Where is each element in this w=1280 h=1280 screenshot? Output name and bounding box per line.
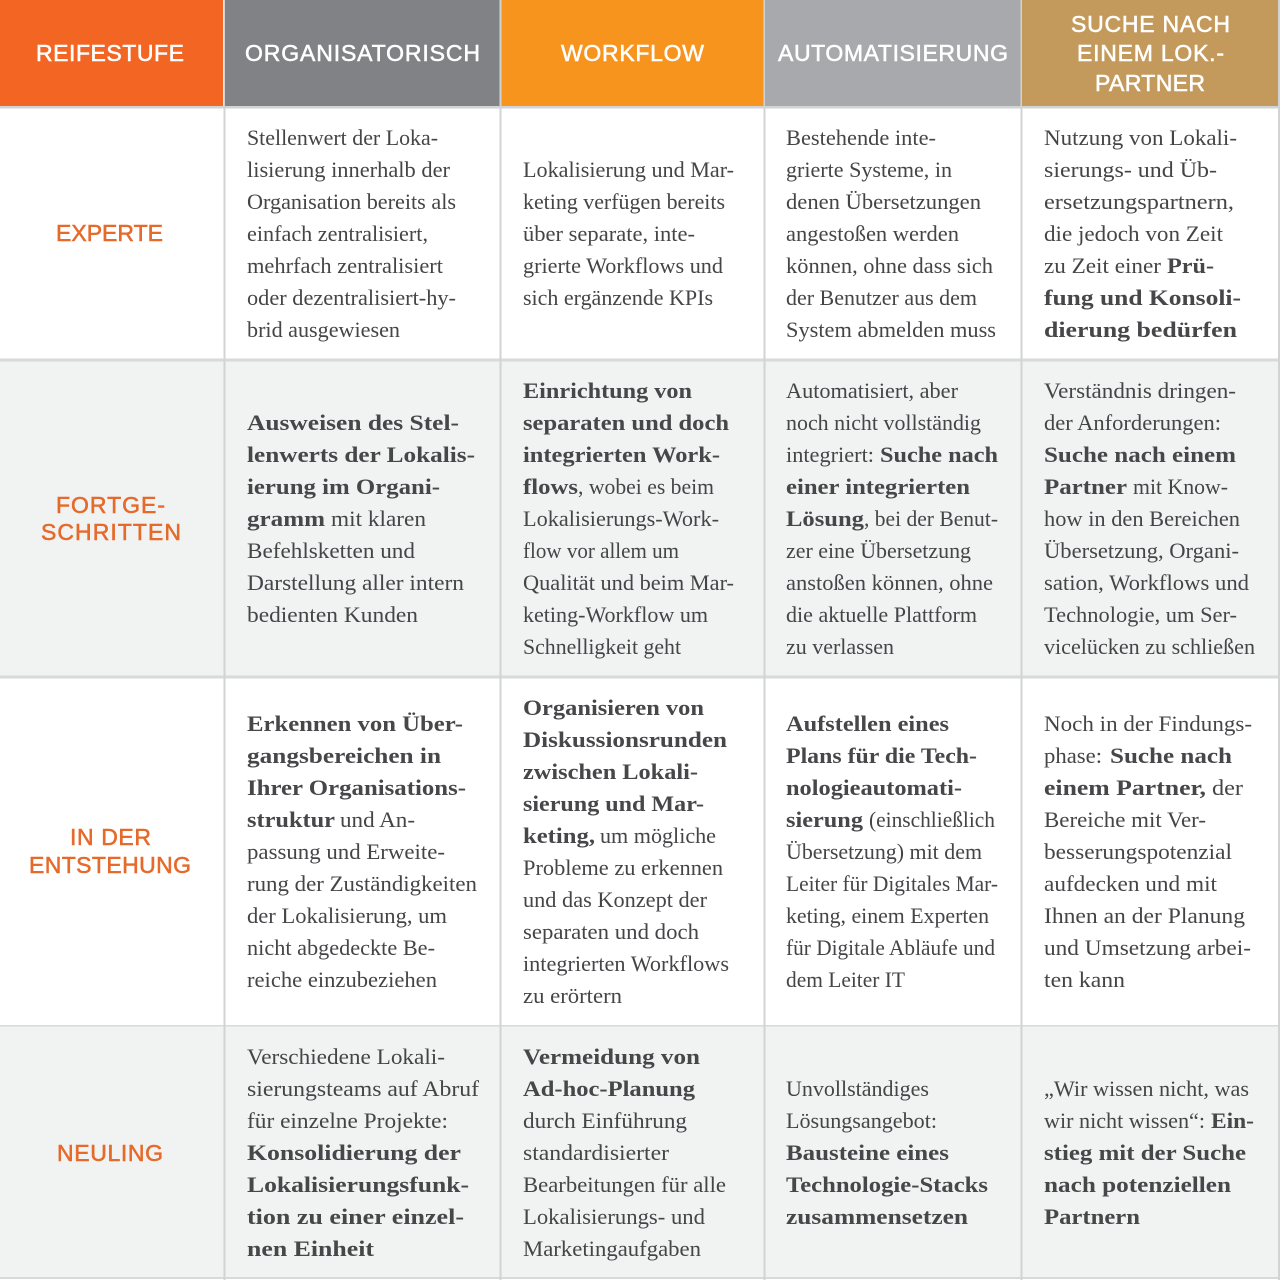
cell: Neuling, Automatisierung: Technologie-Stacks [786,1172,988,1197]
cell: In der Entstehung, organisatorisch: rung der Zuständigkeiten [247,871,477,896]
cell: Fortgeschritten, Workflow: keting-Workflow um [523,602,708,627]
cell: Fortgeschritten, Automatisierung: , bei der Benut- [864,506,998,531]
cell: In der Entstehung, Workflow: separaten und doch [523,919,699,944]
cell: Fortgeschritten, Automatisierung: zer eine Übersetzung [786,538,971,563]
cell: Fortgeschritten, Automatisierung [786,378,998,659]
header: Organisatorisch: ORGANISATORISCH [245,40,480,66]
cell: In der Entstehung, Workflow: Probleme zu erkennen [523,855,723,880]
cell: Neuling, Workflow [523,1044,726,1261]
cell: Fortgeschritten, Workflow: , wobei es beim [578,474,714,499]
row: Fortgeschritten [41,378,1255,659]
cell: Experte, organisatorisch: Stellenwert der Loka- [247,125,438,150]
cell: In der Entstehung, Workflow: zwischen Lokali- [523,759,698,784]
row label: In der Entstehung: IN DER [70,824,151,850]
cell: In der Entstehung, organisatorisch: nicht abgedeckte Be- [247,935,435,960]
cell: Neuling, organisatorisch: Konsolidierung der [247,1140,461,1165]
cell: Fortgeschritten, Lok.-Partner: Suche nach einem [1044,442,1236,467]
cell: Neuling, Workflow: durch Einführung [523,1108,687,1133]
cell: In der Entstehung, Lok.-Partner [1044,711,1252,992]
cell: Fortgeschritten, Automatisierung: Automatisiert, aber [786,378,959,403]
cell: Neuling, Workflow: Vermeidung von [523,1044,700,1069]
cell: Experte, organisatorisch: mehrfach zentralisiert [247,253,443,278]
cell: Experte, Lok.-Partner: sierungs- und Üb- [1044,157,1217,182]
header: Workflow [502,0,764,106]
cell: Neuling, Automatisierung: Bausteine eines [786,1140,949,1165]
cell: In der Entstehung, Automatisierung: Plans für die Tech- [786,743,977,768]
cell: Experte, Automatisierung: denen Übersetzungen [786,189,981,214]
header: Suche nach einem Lok.-Partner: SUCHE NACH [1071,11,1230,37]
cell: In der Entstehung, organisatorisch: passung und Erweite- [247,839,445,864]
cell: In der Entstehung, organisatorisch: Erkennen von Über- [247,711,463,736]
header: Suche nach einem Lok.-Partner: EINEM LOK.- [1077,40,1224,66]
row label: Fortgeschritten [41,492,181,545]
cell: Fortgeschritten, Automatisierung: einer integrierten [786,474,970,499]
cell: Fortgeschritten, Workflow: Einrichtung von [523,378,692,403]
row label: Fortgeschritten: SCHRITTEN [41,519,181,545]
cell: Experte, Lok.-Partner: zu Zeit einer [1044,253,1162,278]
cell: Fortgeschritten, Workflow: integrierten Work- [523,442,720,467]
cell: In der Entstehung, Workflow [523,695,729,1008]
cell: Neuling, Workflow: standardisierter [523,1140,670,1165]
cell: Neuling, Automatisierung: Lösungsangebot: [786,1108,937,1133]
cell: In der Entstehung, Automatisierung: Aufstellen eines [786,711,949,736]
cell: Fortgeschritten, Automatisierung: Suche nach [880,442,998,467]
cell: Experte, Workflow: Lokalisierung und Mar- [523,157,734,182]
cell: Neuling, organisatorisch: tion zu einer einzel- [247,1204,464,1229]
cell: In der Entstehung, Automatisierung: sierung [786,807,863,832]
cell: In der Entstehung, Workflow: integrierten Workflows [523,951,729,976]
cell: Experte, Workflow: sich ergänzende KPIs [523,285,713,310]
cell: In der Entstehung, Lok.-Partner: der [1212,775,1244,800]
cell: Fortgeschritten, organisatorisch: bedienten Kunden [247,602,418,627]
cell: In der Entstehung, Lok.-Partner: Bereiche mit Ver- [1044,807,1206,832]
cell: Experte, organisatorisch: Organisation bereits als [247,189,456,214]
cell: Fortgeschritten, Lok.-Partner: sation, Workflows und [1044,570,1249,595]
cell: Experte, Lok.-Partner: die jedoch von Zeit [1044,221,1223,246]
cell: Experte, Automatisierung: grierte Systeme, in [786,157,952,182]
cell: Neuling, organisatorisch: für einzelne Projekte: [247,1108,448,1133]
cell: In der Entstehung, organisatorisch: der Lokalisierung, um [247,903,447,928]
cell: In der Entstehung, Lok.-Partner: Ihnen an der Planung [1044,903,1245,928]
cell: In der Entstehung, Automatisierung [786,711,998,992]
cell: Neuling, Lok.-Partner: nach potenziellen [1044,1172,1231,1197]
cell: In der Entstehung, organisatorisch [247,711,477,992]
cell: Neuling, Workflow: Lokalisierungs- und [523,1204,705,1229]
row label: In der Entstehung [29,824,191,878]
cell: Neuling, Lok.-Partner: Ein- [1211,1108,1254,1133]
cell: Neuling, Lok.-Partner: stieg mit der Suche [1044,1140,1246,1165]
cell: Experte, organisatorisch: einfach zentralisiert, [247,221,428,246]
header: Reifestufe: REIFESTUFE [36,40,184,66]
cell: Experte, organisatorisch: brid ausgewiesen [247,317,400,342]
cell: Experte, Lok.-Partner: Prü- [1167,253,1214,278]
cell: In der Entstehung, Automatisierung: nologieautomati- [786,775,962,800]
row: Neuling [57,1044,1254,1261]
row label: Neuling: NEULING [57,1140,163,1166]
cell: Fortgeschritten, Automatisierung: noch nicht vollständig [786,410,981,435]
cell: Neuling, Lok.-Partner: wir nicht wissen“: [1044,1108,1205,1133]
cell: Neuling, Lok.-Partner [1044,1076,1254,1229]
cell: Neuling, Workflow: Ad-hoc-Planung [523,1076,695,1101]
header: Suche nach einem Lok.-Partner: PARTNER [1095,70,1205,96]
cell: In der Entstehung, Workflow: Organisieren von [523,695,704,720]
cell: Fortgeschritten, organisatorisch: mit klaren [331,506,426,531]
cell: In der Entstehung, Workflow: sierung und Mar- [523,791,704,816]
cell: Experte, Lok.-Partner: ersetzungspartnern, [1044,189,1234,214]
cell: In der Entstehung, Workflow: zu erörtern [523,983,622,1008]
cell: Fortgeschritten, Automatisierung: anstoßen können, ohne [786,570,993,595]
cell: Fortgeschritten, Automatisierung: integriert: [786,442,874,467]
cell: Fortgeschritten, organisatorisch: Befehlsketten und [247,538,415,563]
cell: Fortgeschritten, organisatorisch: lenwerts der Lokalis- [247,442,475,467]
cell: Neuling, Lok.-Partner: „Wir wissen nicht, was [1044,1076,1249,1101]
cell: In der Entstehung, Automatisierung: für Digitale Abläufe und [786,935,995,960]
cell: Fortgeschritten, Lok.-Partner: how in den Bereichen [1044,506,1240,531]
row: In der Entstehung [29,695,1252,1008]
cell: Fortgeschritten, Workflow: flow vor allem um [523,538,679,563]
cell: Fortgeschritten, Lok.-Partner: vicelücken zu schließen [1044,634,1255,659]
cell: In der Entstehung, Automatisierung: (einschließlich [869,807,995,832]
cell: In der Entstehung, Automatisierung: dem Leiter IT [786,967,906,992]
header: Reifestufe [0,0,223,106]
cell: In der Entstehung, Workflow: und das Konzept der [523,887,708,912]
cell: Neuling, Automatisierung: zusammensetzen [786,1204,968,1229]
cell: Neuling, Automatisierung [786,1076,988,1229]
cell: Fortgeschritten, Workflow: separaten und doch [523,410,729,435]
row label: In der Entstehung: ENTSTEHUNG [29,852,191,878]
cell: Experte, Workflow [523,157,734,310]
cell: Experte, organisatorisch: oder dezentralisiert-hy- [247,285,456,310]
cell: Experte, Automatisierung: können, ohne dass sich [786,253,993,278]
cell: In der Entstehung, Lok.-Partner: Suche nach [1110,743,1232,768]
cell: In der Entstehung, Lok.-Partner: phase: [1044,743,1102,768]
row label: Experte: EXPERTE [56,220,163,246]
cell: Fortgeschritten, organisatorisch: Darstellung aller intern [247,570,464,595]
cell: Experte, Automatisierung: angestoßen werden [786,221,959,246]
header: Suche nach einem Lok.-Partner [1022,0,1278,106]
cell: Experte, Automatisierung: Bestehende inte- [786,125,936,150]
cell: In der Entstehung, Workflow: keting, [523,823,595,848]
header: Automatisierung [765,0,1020,106]
cell: Fortgeschritten, Automatisierung: zu verlassen [786,634,894,659]
cell: Fortgeschritten, Lok.-Partner: Verständnis dringen- [1044,378,1236,403]
cell: In der Entstehung, Automatisierung: Übersetzung) mit dem [786,839,982,864]
cell: Neuling, organisatorisch: sierungsteams auf Abruf [247,1076,480,1101]
cell: Fortgeschritten, Workflow [523,378,734,659]
cell: In der Entstehung, Lok.-Partner: aufdecken und mit [1044,871,1217,896]
cell: Fortgeschritten, Lok.-Partner: Partner [1044,474,1127,499]
header: Workflow: WORKFLOW [561,40,704,66]
cell: Fortgeschritten, Automatisierung: die aktuelle Plattform [786,602,977,627]
cell: Fortgeschritten, Lok.-Partner: Technologie, um Ser- [1044,602,1237,627]
header: Automatisierung: AUTOMATISIERUNG [778,40,1008,66]
cell: In der Entstehung, organisatorisch: struktur [247,807,335,832]
cell: In der Entstehung, Automatisierung: keting, einem Experten [786,903,989,928]
cell: In der Entstehung, organisatorisch: reiche einzubeziehen [247,967,437,992]
cell: In der Entstehung, Workflow: um mögliche [600,823,716,848]
cell: In der Entstehung, Lok.-Partner: einem Partner, [1044,775,1206,800]
cell: Fortgeschritten, Lok.-Partner [1044,378,1255,659]
cell: Experte, organisatorisch [247,125,456,342]
cell: In der Entstehung, Lok.-Partner: Noch in der Findungs- [1044,711,1252,736]
cell: In der Entstehung, Lok.-Partner: und Umsetzung arbei- [1044,935,1251,960]
cell: Neuling, organisatorisch: nen Einheit [247,1236,375,1261]
cell: Fortgeschritten, Workflow: Qualität und beim Mar- [523,570,734,595]
cell: Fortgeschritten, organisatorisch: gramm [247,506,325,531]
cell: Fortgeschritten, Workflow: Lokalisierungs-Work- [523,506,719,531]
cell: Fortgeschritten, Lok.-Partner: Übersetzung, Organi- [1044,538,1239,563]
cell: Neuling, Workflow: Bearbeitungen für alle [523,1172,726,1197]
row: Experte [56,125,1241,342]
cell: In der Entstehung, Automatisierung: Leiter für Digitales Mar- [786,871,998,896]
cell: Experte, Workflow: keting verfügen bereits [523,189,725,214]
cell: Neuling, organisatorisch: Lokalisierungsfunk- [247,1172,469,1197]
cell: In der Entstehung, Lok.-Partner: ten kann [1044,967,1125,992]
cell: Neuling, organisatorisch [247,1044,480,1261]
cell: In der Entstehung, organisatorisch: Ihrer Organisations- [247,775,466,800]
cell: Experte, Automatisierung: System abmelden muss [786,317,996,342]
cell: Neuling, organisatorisch: Verschiedene Lokali- [247,1044,445,1069]
cell: In der Entstehung, organisatorisch: und An- [340,807,415,832]
cell: Experte, organisatorisch: lisierung innerhalb der [247,157,451,182]
cell: Fortgeschritten, Workflow: Schnelligkeit geht [523,634,681,659]
cell: Experte, Lok.-Partner: fung und Konsoli- [1044,285,1241,310]
cell: Fortgeschritten, Lok.-Partner: der Anforderungen: [1044,410,1221,435]
row label: Fortgeschritten: FORTGE- [56,492,165,518]
cell: Experte, Automatisierung: der Benutzer aus dem [786,285,977,310]
cell: In der Entstehung, organisatorisch: gangsbereichen in [247,743,441,768]
cell: Neuling, Lok.-Partner: Partnern [1044,1204,1140,1229]
cell: Experte, Workflow: grierte Workflows und [523,253,723,278]
header: Organisatorisch [225,0,500,106]
cell: Fortgeschritten, organisatorisch: Ausweisen des Stel- [247,410,459,435]
header row [0,0,1278,106]
cell: Neuling, Automatisierung: Unvollständiges [786,1076,929,1101]
cell: Experte, Workflow: über separate, inte- [523,221,695,246]
cell: Neuling, Workflow: Marketingaufgaben [523,1236,701,1261]
cell: Experte, Lok.-Partner: dierung bedürfen [1044,317,1237,342]
cell: In der Entstehung, Workflow: Diskussionsrunden [523,727,727,752]
cell: Fortgeschritten, Lok.-Partner: mit Know- [1133,474,1228,499]
cell: Fortgeschritten, Automatisierung: Lösung [786,506,864,531]
cell: Fortgeschritten, organisatorisch [247,410,475,627]
cell: Experte, Lok.-Partner [1044,125,1241,342]
cell: Experte, Automatisierung [786,125,996,342]
cell: In der Entstehung, Lok.-Partner: besserungspotenzial [1044,839,1232,864]
cell: Fortgeschritten, organisatorisch: ierung im Organi- [247,474,440,499]
cell: Experte, Lok.-Partner: Nutzung von Lokali- [1044,125,1237,150]
cell: Fortgeschritten, Workflow: flows [523,474,578,499]
